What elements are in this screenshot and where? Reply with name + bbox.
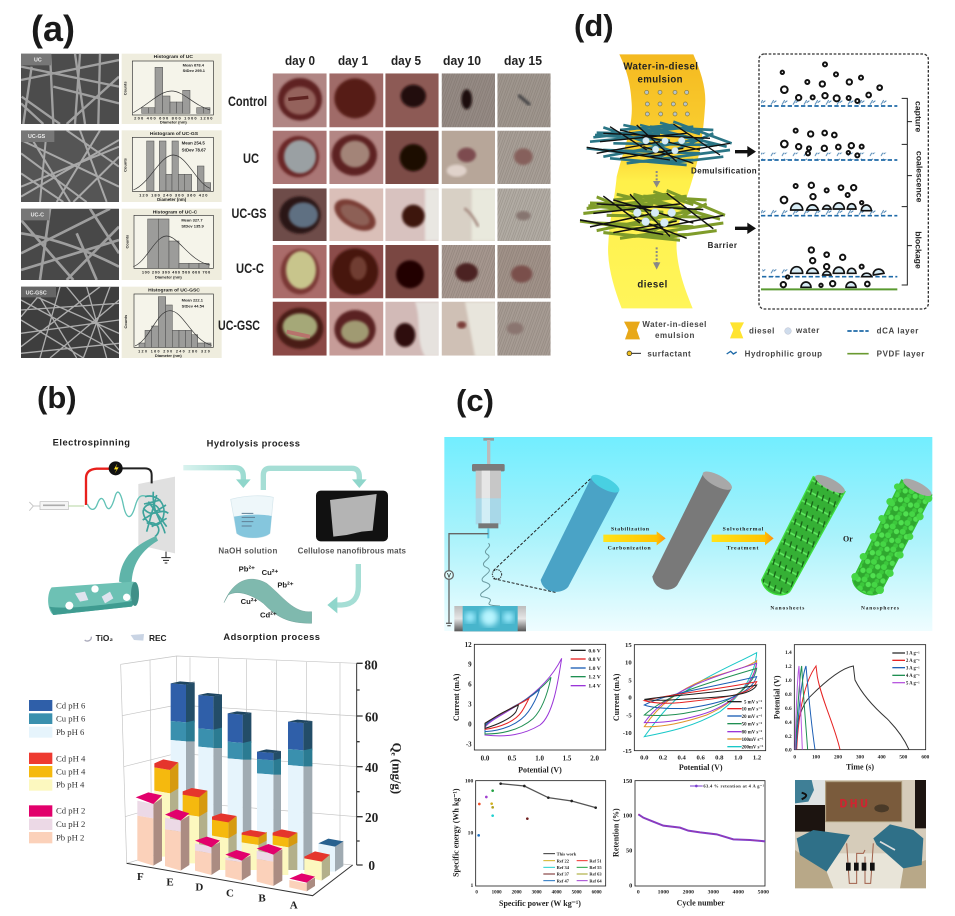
- histogram UC-C: Diameter (nm): [155, 275, 182, 280]
- SEM image UC-C: [21, 208, 119, 280]
- TiO2 and REC legend: TiO₂: [96, 633, 113, 643]
- nanostructure labels: Nanosheets: [770, 605, 804, 611]
- Ragone chart: Ref 63: [589, 872, 602, 877]
- CV chart voltage windows: Potential (V): [518, 765, 562, 774]
- Ragone chart: 1000: [492, 891, 502, 896]
- legend: Pb pH 4: [56, 780, 85, 790]
- histogram UC-C: StDev 135.9: [181, 223, 204, 228]
- demulsification label: Demulsification: [691, 167, 757, 176]
- GCD chart: 1 A g⁻¹: [906, 651, 920, 657]
- adsorption sheet: [224, 579, 312, 623]
- CV chart scan rates: 10: [625, 660, 632, 667]
- legend: Cu pH 2: [56, 819, 85, 829]
- CV chart voltage windows: 0.6 V: [588, 648, 602, 654]
- hydrolysis title: Hydrolysis process: [207, 439, 300, 449]
- axis title: Qₑ (mg/g): [390, 743, 404, 794]
- histogram UC-GSC: Counts: [123, 314, 128, 329]
- CV chart voltage windows: 12: [465, 641, 472, 649]
- histogram UC-GSC: StDev 44.54: [182, 303, 205, 308]
- Ragone chart: This work: [557, 851, 577, 856]
- ground symbol: [161, 552, 171, 563]
- CV chart scan rates: 0: [628, 695, 632, 702]
- schematic background: [444, 437, 932, 631]
- CV chart scan rates: [612, 642, 766, 772]
- legend: Hydrophilic group: [745, 349, 822, 358]
- beaker with NaOH: [231, 496, 273, 538]
- CV chart voltage windows: 0: [468, 720, 472, 728]
- CV chart voltage windows: 1.0: [535, 754, 545, 762]
- ion labels: Cu²⁺: [262, 568, 278, 577]
- histogram UC-GS: Mean 254.5: [182, 141, 205, 146]
- CV chart scan rates: Potential (V): [679, 763, 723, 772]
- row labels: UC-GSC: [218, 318, 260, 333]
- arrow stabilization: [603, 531, 666, 545]
- dashed gray arrows: [653, 115, 836, 270]
- GCD chart: 0.8: [785, 692, 792, 698]
- legend: surfactant: [647, 349, 691, 358]
- GCD chart: 5 A g⁻¹: [906, 680, 920, 686]
- water-in-diesel emulsion text: emulsion: [637, 74, 683, 85]
- CV chart scan rates: 100mV s⁻¹: [742, 737, 764, 743]
- nanostructure labels: [770, 605, 899, 611]
- gray carbon fiber: [652, 468, 734, 590]
- legend: dCA layer: [877, 326, 918, 335]
- CV chart scan rates: 80 mV s⁻¹: [742, 730, 763, 736]
- CV chart voltage windows: 1.0 V: [588, 666, 602, 672]
- water-in-diesel emulsion text: Water-in-diesel: [623, 62, 698, 73]
- stabilization text: [608, 527, 652, 552]
- CV chart scan rates: 200mV s⁻¹: [742, 745, 764, 751]
- histogram UC-GSC: [122, 287, 222, 358]
- retention chart: 150: [623, 778, 632, 785]
- nanostructure labels: Nanospheres: [861, 605, 899, 611]
- device demo photo: DHU: [839, 797, 870, 812]
- value axis labels: 60: [365, 709, 379, 724]
- CV chart voltage windows: 0.5: [508, 754, 517, 762]
- histogram UC: Histogram of UC: [154, 54, 193, 60]
- retention chart: 1000: [658, 890, 669, 896]
- TiO2 and REC legend: REC: [149, 633, 167, 643]
- panel (a): wound healing nanofibers: [21, 8, 551, 358]
- chart floor and right axis: [127, 663, 363, 896]
- Ragone chart: Ref 64: [589, 878, 602, 883]
- histogram UC-C: Counts: [124, 234, 129, 249]
- row labels: Control: [228, 94, 267, 109]
- CV chart voltage windows: 3: [468, 701, 472, 709]
- jet wave: [87, 492, 147, 517]
- histogram UC: 200 400 600 800 1000 1200: [134, 116, 213, 121]
- legend: [29, 700, 86, 843]
- heading (a): (a): [31, 8, 75, 49]
- flow arrows: [183, 468, 359, 605]
- SEM image UC-C: UC-C: [31, 213, 44, 219]
- row labels: UC: [243, 151, 259, 166]
- histogram UC: StDev 295.1: [183, 68, 206, 73]
- legend: diesel: [749, 327, 774, 336]
- syringe: [472, 438, 505, 538]
- day labels: day 15: [504, 53, 542, 68]
- electrochemical charts: [451, 641, 930, 908]
- Ragone chart: Ref 47: [557, 878, 570, 883]
- fabrication schematic: [444, 437, 934, 631]
- GCD chart: 3 A g⁻¹: [906, 665, 920, 671]
- CV chart voltage windows: 6: [468, 681, 472, 689]
- histogram UC-GSC: Diameter (nm): [155, 353, 182, 358]
- category labels: [137, 871, 298, 911]
- CV chart voltage windows: -3: [466, 740, 472, 748]
- SEM image UC: [21, 54, 119, 124]
- histogram UC: Mean 678.4: [183, 62, 205, 67]
- 3D bar chart of adsorption capacity: [29, 656, 404, 911]
- retention chart: [611, 778, 769, 907]
- histogram UC-GS: 120 180 240 300 360 420: [139, 192, 208, 197]
- CV chart scan rates: 50 mV s⁻¹: [742, 722, 763, 728]
- SEM image UC-GS: UC-GS: [28, 134, 46, 140]
- solvothermal text: Solvothermal: [723, 527, 764, 533]
- wound photo grid: [273, 73, 551, 357]
- Ragone chart: 5000: [572, 891, 582, 896]
- stage labels: [913, 101, 925, 269]
- SEM images and histograms: [21, 54, 222, 358]
- retention chart: 3000: [708, 890, 719, 896]
- enlarged fiber: [48, 536, 158, 615]
- CV chart scan rates: 5: [628, 677, 632, 684]
- Ragone chart: Ref 22: [557, 858, 570, 863]
- voltage circuit: V: [447, 573, 451, 579]
- Ragone chart: 0: [475, 891, 478, 896]
- barrier label: Barrier: [708, 241, 737, 250]
- stabilization text: Stabilization: [611, 527, 650, 533]
- ion labels: Pb²⁺: [277, 580, 294, 589]
- retention chart: Cycle number: [677, 898, 725, 907]
- legend: Cd pH 6: [56, 700, 86, 710]
- retention chart: 50: [626, 847, 632, 854]
- GCD chart: 2 A g⁻¹: [906, 658, 920, 664]
- Ragone chart: 6000: [592, 891, 602, 896]
- stage labels: capture: [913, 101, 923, 132]
- SEM image UC-GSC: [21, 286, 119, 358]
- GCD chart: 1.4: [785, 650, 792, 656]
- value axis labels: 0: [368, 858, 375, 873]
- Ragone chart: 4000: [552, 891, 562, 896]
- GCD chart: 1.0: [785, 678, 792, 684]
- histogram UC: Diameter (nm): [160, 119, 187, 124]
- bars pH 4: [154, 759, 330, 881]
- heading (b): (b): [37, 380, 77, 415]
- value axis labels: 80: [364, 657, 378, 672]
- CV chart scan rates: 0.6: [697, 755, 705, 762]
- CV chart voltage windows: 1.4 V: [588, 684, 602, 690]
- CV chart scan rates: -5: [626, 712, 632, 719]
- nanosheet fiber: [762, 471, 847, 595]
- day labels: day 0: [285, 53, 315, 68]
- histogram UC-GS: Counts: [122, 157, 127, 172]
- GCD chart: Time (s): [846, 763, 874, 772]
- CV chart scan rates: 15: [625, 642, 632, 649]
- stabilization text: Carbonization: [608, 546, 652, 552]
- emulsion droplets: [645, 90, 689, 116]
- fiber mat on collector: [143, 492, 168, 537]
- TiO2 and REC legend: [85, 633, 167, 643]
- legend: emulsion: [655, 331, 694, 340]
- ion labels: Pb²⁺: [239, 565, 255, 574]
- jet spiral: [481, 543, 500, 606]
- heading (c): (c): [456, 383, 494, 418]
- CV chart scan rates: 0.8: [715, 755, 724, 762]
- category labels: A: [290, 899, 298, 911]
- histogram UC-C: Mean 327.7: [181, 217, 203, 222]
- panel (b): electrospinning and adsorption: [29, 380, 407, 643]
- Ragone chart: 100: [465, 779, 474, 785]
- GCD chart: 4 A g⁻¹: [906, 673, 920, 679]
- syringe: [29, 502, 84, 511]
- ion labels: Cd²⁺: [260, 610, 277, 619]
- CV chart voltage windows: Current (mA): [452, 673, 461, 721]
- teal fiber membrane: [587, 122, 732, 165]
- GCD chart: 0.4: [785, 720, 792, 726]
- Ragone chart: Specific energy (Wh kg⁻¹): [451, 788, 460, 877]
- value axis labels: [364, 657, 379, 873]
- histogram UC-GS: StDev 78.67: [182, 147, 207, 152]
- CV chart scan rates: 0.4: [678, 755, 686, 762]
- category labels: E: [166, 877, 174, 889]
- GCD chart: 100: [812, 755, 820, 761]
- GCD chart: 600: [921, 755, 930, 761]
- retention chart: 63.4 % retention at 4 A g⁻¹: [703, 784, 765, 789]
- histogram UC-C: 100 200 300 400 500 600 700: [142, 270, 211, 275]
- histogram UC-GS: [122, 130, 222, 202]
- GCD chart: Potential (V): [772, 675, 781, 719]
- CV chart scan rates: 1.2: [753, 755, 762, 762]
- Ragone chart: 1: [471, 883, 474, 889]
- Ragone chart: Ref 37: [557, 872, 570, 877]
- CV chart voltage windows: 9: [468, 661, 472, 669]
- CV chart voltage windows: 0.0: [481, 754, 490, 762]
- legend: [624, 320, 924, 358]
- high voltage source: [86, 461, 152, 505]
- histogram UC-GS: Histogram of UC-GS: [150, 131, 199, 137]
- CV chart voltage windows: 1.2 V: [588, 675, 602, 681]
- Ragone chart: Ref 51: [589, 858, 602, 863]
- GCD chart: 0.6: [785, 706, 792, 712]
- histogram UC: Counts: [122, 81, 127, 95]
- roller collector: [454, 606, 526, 631]
- row labels: UC-GS: [232, 206, 266, 221]
- row labels: UC-C: [236, 261, 264, 276]
- category labels: F: [137, 871, 144, 883]
- stage labels: coalescence: [915, 151, 925, 203]
- emulsion and diesel band: [608, 54, 705, 308]
- heading (d): (d): [574, 8, 614, 43]
- GCD chart: 0.0: [785, 748, 792, 754]
- CV chart scan rates: -15: [623, 748, 632, 755]
- retention chart: 100: [623, 812, 632, 819]
- day labels: day 1: [338, 53, 368, 68]
- CV chart scan rates: 1.0: [734, 755, 743, 762]
- category labels: D: [195, 882, 203, 894]
- histogram UC-GS: Diameter (nm): [157, 197, 187, 202]
- GCD chart: 0.2: [785, 734, 792, 740]
- row labels: [218, 94, 267, 333]
- CV chart scan rates: 10 mV s⁻¹: [742, 707, 763, 713]
- voltage circuit: [445, 534, 488, 626]
- category labels: C: [226, 888, 234, 900]
- histogram UC-C: [122, 209, 222, 280]
- black arrows: [735, 146, 756, 234]
- retention chart: 5000: [758, 890, 769, 896]
- Ragone chart: [451, 779, 606, 908]
- adsorption title: Adsorption process: [223, 632, 320, 642]
- legend: PVDF layer: [877, 349, 924, 358]
- device demo photo: [795, 780, 926, 888]
- water-in-diesel emulsion text: [623, 62, 698, 85]
- Ragone chart: Ref 34: [557, 865, 570, 870]
- cellulose mat photo: [316, 491, 388, 541]
- solvothermal text: Treatment: [727, 546, 758, 552]
- Ragone chart: 3000: [532, 891, 542, 896]
- category labels: B: [258, 893, 266, 905]
- GCD chart: 1.2: [785, 664, 792, 670]
- dashed detail box: [759, 54, 928, 309]
- day labels: day 10: [443, 53, 481, 68]
- cellulose label: Cellulose nanofibrous mats: [298, 547, 407, 556]
- chart walls and grid: [121, 656, 357, 865]
- zoom lines: [492, 478, 592, 593]
- legend: Cd pH 2: [56, 806, 85, 816]
- retention chart: 2000: [683, 890, 694, 896]
- solvothermal text: [723, 527, 764, 552]
- histogram UC: [122, 54, 222, 124]
- CV chart voltage windows: [452, 641, 606, 774]
- GCD chart: 0: [793, 755, 796, 761]
- panel (c): supercapacitor fibers: [444, 383, 934, 908]
- stage labels: blockage: [913, 231, 923, 269]
- CV chart scan rates: 0.0: [640, 755, 649, 762]
- legend: Cd pH 4: [56, 754, 86, 764]
- Ragone chart: 2000: [512, 891, 522, 896]
- legend: water: [795, 326, 819, 335]
- CV chart scan rates: 20 mV s⁻¹: [742, 714, 763, 720]
- CV chart voltage windows: 2.0: [590, 754, 600, 762]
- blue fiber: [541, 471, 622, 592]
- value axis labels: 20: [365, 810, 379, 825]
- day labels: day 5: [391, 53, 421, 68]
- collector plate: [138, 477, 175, 553]
- legend: Cu pH 4: [56, 766, 86, 776]
- or text: Or: [843, 534, 853, 543]
- GCD chart: 200: [834, 755, 842, 761]
- CV chart scan rates: 0.2: [659, 755, 668, 762]
- histogram UC-C: Histogram of UC-C: [153, 209, 198, 215]
- retention chart: 0: [637, 890, 640, 896]
- bars pH 6: [171, 681, 343, 877]
- GCD chart: 400: [878, 755, 886, 761]
- bars pH 2: [136, 792, 315, 891]
- NaOH label: NaOH solution: [218, 547, 277, 556]
- CV chart scan rates: -10: [623, 730, 632, 737]
- value axis labels: 40: [365, 760, 379, 775]
- Ragone chart: Specific power (W kg⁻¹): [499, 899, 581, 908]
- GCD chart: 500: [899, 755, 908, 761]
- nanosphere fiber: [851, 475, 934, 595]
- SEM image UC: UC: [34, 57, 42, 63]
- legend: Water-in-diesel: [642, 320, 706, 329]
- legend: Pb pH 2: [56, 832, 84, 842]
- retention chart: Retention (%): [611, 808, 620, 857]
- retention chart: 0: [629, 882, 632, 889]
- CV chart scan rates: Current (mA): [612, 673, 621, 721]
- panel (d): water-in-diesel separation: [574, 8, 928, 358]
- retention chart: 4000: [733, 890, 744, 896]
- CV chart voltage windows: 0.8 V: [588, 657, 602, 663]
- SEM image UC-GS: [21, 130, 119, 202]
- diesel label: diesel: [637, 280, 667, 291]
- Ragone chart: 10: [468, 831, 474, 837]
- arrowheads: [236, 479, 367, 613]
- day labels: [285, 53, 542, 68]
- SEM image UC-GSC: UC-GSC: [26, 290, 47, 296]
- ion labels: Cu²⁺: [241, 597, 257, 606]
- green fiber membrane: [580, 190, 725, 240]
- CV chart voltage windows: 1.5: [563, 754, 572, 762]
- legend: Cu pH 6: [56, 714, 86, 724]
- GCD chart: 300: [856, 755, 864, 761]
- Ragone chart: Ref 55: [589, 865, 602, 870]
- CV chart scan rates: 5 mV s⁻¹: [744, 699, 763, 705]
- histogram UC-GSC: Histogram of UC-GSC: [148, 288, 200, 294]
- GCD chart: [772, 645, 930, 772]
- electrospinning title: Electrospinning: [53, 438, 130, 448]
- legend: Pb pH 6: [56, 727, 85, 737]
- ion labels: [239, 565, 294, 619]
- arrow solvothermal: [712, 531, 774, 545]
- histogram UC-GSC: Mean 222.1: [182, 297, 204, 302]
- histogram UC-GSC: 120 160 200 240 280 320: [138, 350, 210, 354]
